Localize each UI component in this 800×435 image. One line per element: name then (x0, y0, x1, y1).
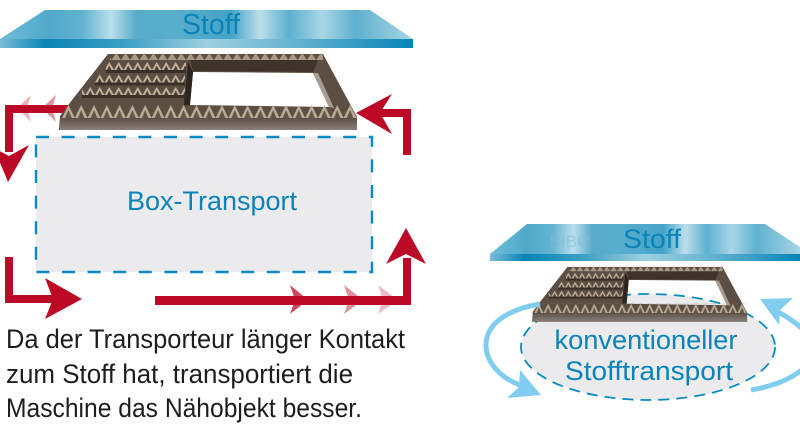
caption text (6, 324, 405, 423)
fabric plate: Stoff (0, 9, 413, 48)
fabric plate: Stoff: Stoff (182, 9, 241, 41)
arrow: top left, down (0, 105, 71, 182)
faded arrowheads: top left (17, 95, 56, 122)
arrow: right curved (751, 298, 800, 390)
label: konventioneller Stofftransport: konventioneller (554, 325, 738, 355)
box: Box-Transport: Box-Transport (127, 186, 297, 216)
arrow: bottom left, right (5, 257, 82, 319)
box: Box-Transport (36, 137, 372, 272)
arrow: left curved (486, 304, 541, 398)
caption text: zum Stoff hat, transportiert die (6, 359, 353, 389)
fabric plate: Stoff small: BIBO (550, 232, 590, 251)
caption text: Maschine das Nähobjekt besser. (6, 393, 362, 423)
panel: box transport (0, 9, 426, 423)
arrow: bottom, right and up (155, 228, 426, 305)
label: konventioneller Stofftransport (554, 325, 738, 386)
fabric plate: Stoff small: Stoff (623, 224, 682, 254)
caption text: Da der Transporteur länger Kontakt (6, 324, 405, 354)
label: konventioneller Stofftransport: Stofftransport (565, 356, 734, 386)
faded arrowheads: bottom (290, 285, 398, 314)
ellipse: conventional motion path (521, 294, 775, 400)
panel: conventional transport (486, 224, 800, 400)
feed dog: large (59, 53, 357, 130)
arrow: top right, toward feed dog (356, 94, 411, 155)
feed dog: small (532, 266, 747, 322)
fabric plate: Stoff small (490, 224, 800, 261)
